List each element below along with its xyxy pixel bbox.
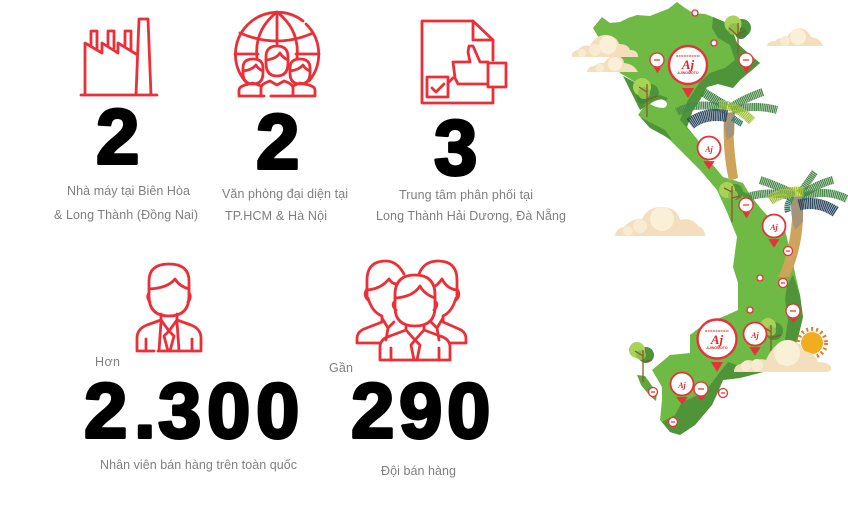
map of Vietnam [572,2,847,435]
map pin: large south: Aj [710,332,724,347]
icon: factory [81,19,157,95]
statistic: sales staff: Hơn [95,355,120,369]
small pin marks [651,60,796,422]
Phu Quoc island [637,375,657,401]
sun [798,329,826,357]
icon: globe with people [235,12,319,96]
map pin labels: Aj [769,223,779,232]
map pin: large south [698,320,736,372]
statistic: sales staff: 2.300 [84,366,299,454]
statistic: distribution centers: 3 [434,104,477,192]
icon: document with thumbs up [422,21,506,103]
map pins: medium [670,136,786,403]
clouds over the north [572,35,638,72]
upper right cloud [767,28,823,46]
cloud in front [734,340,831,372]
map pin: large north: AJINOMOTO [677,71,699,75]
statistic: sales teams [329,361,490,478]
map pin: large south: AJINOMOTO [706,346,728,350]
map pin: large north [669,46,707,98]
coastal shading [623,17,803,435]
trees [629,16,783,382]
white notch [650,100,667,108]
statistic: offices: TP.HCM & Hà Nội [225,209,327,223]
map pin labels: Aj [750,331,760,340]
map pin labels: Aj [677,381,687,390]
statistic: sales staff: Nhân viên bán hàng trên toàn quốc [100,458,297,472]
icon: salesperson [137,264,201,351]
map pin: large north: Aj [681,57,695,72]
statistic: sales teams: Đội bán hàng [381,464,456,478]
statistic: sales teams: 290 [351,366,490,454]
statistic: distribution centers [376,104,566,223]
map pins: small [648,10,800,426]
icon: sales team [357,261,466,360]
statistic: factories: 2 [96,92,139,180]
map pin labels: Aj [704,145,714,154]
statistic: factories: Nhà máy tại Biên Hòa [67,184,190,198]
mid cloud [615,207,705,236]
statistic: factories [54,92,198,222]
statistic: distribution centers: Trung tâm phân phối tại [399,188,533,202]
statistic: sales teams: Gần [329,361,353,375]
statistic: offices [222,98,348,223]
mainland [593,2,803,435]
statistic: offices: 2 [256,98,299,186]
map pin labels [677,145,779,390]
palm tree north [677,92,777,181]
statistic: offices: Văn phòng đại diện tại [222,187,348,201]
statistic: factories: & Long Thành (Đồng Nai) [54,208,198,222]
palm tree central [748,172,847,277]
statistic: distribution centers: Long Thành Hải Dương, Đà Nẵng [376,208,566,223]
